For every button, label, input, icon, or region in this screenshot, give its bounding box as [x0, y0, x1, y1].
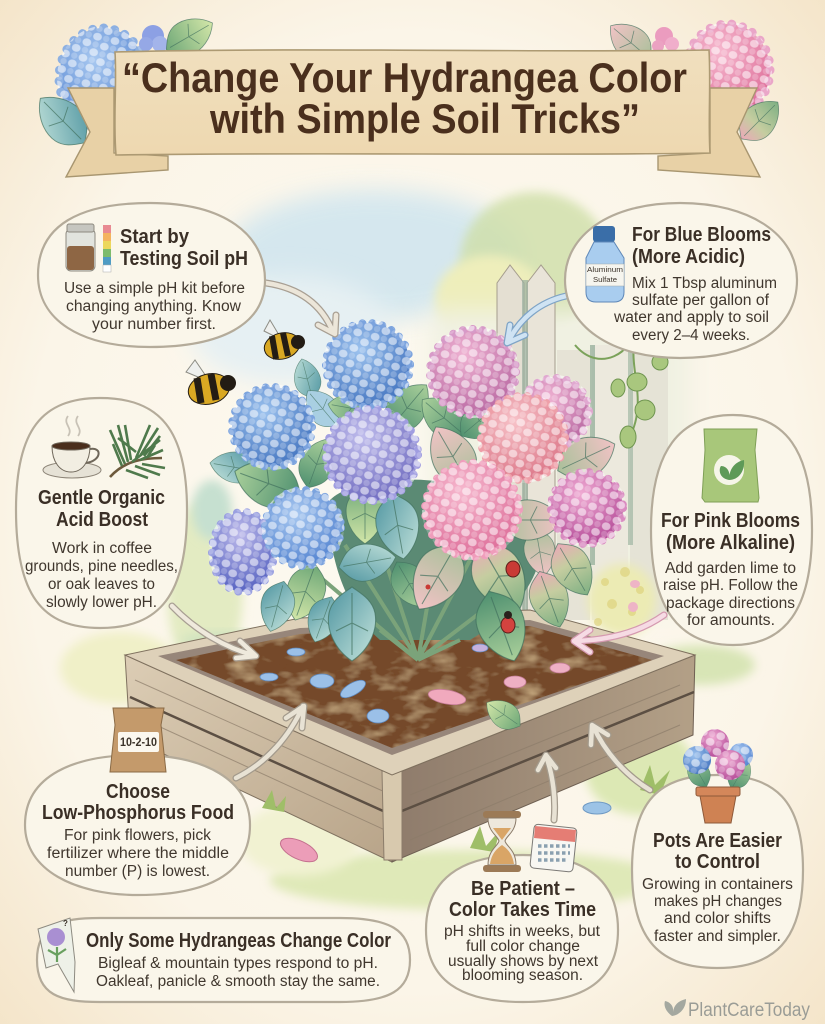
arrows	[172, 283, 664, 820]
text: Color Takes Time	[449, 899, 596, 921]
text: Testing Soil pH	[120, 248, 248, 270]
text	[444, 878, 601, 984]
raised wooden garden bed	[125, 610, 695, 862]
text	[613, 224, 777, 344]
panel: only some hydrangeas change color	[37, 918, 410, 1002]
soil	[176, 626, 652, 748]
text	[661, 510, 800, 629]
pink head top	[427, 326, 519, 418]
text: (More Acidic)	[632, 246, 745, 268]
text: Choose	[106, 781, 170, 803]
text: faster and simpler.	[654, 928, 781, 945]
text: usually shows by next	[448, 953, 599, 970]
text	[64, 226, 248, 333]
text: Work in coffee	[52, 540, 152, 557]
text: full color change	[466, 938, 580, 955]
ladybugs	[426, 561, 520, 633]
text: Only Some Hydrangeas Change Color	[86, 930, 391, 952]
icon: fertilizer bag: 10-2-10	[120, 735, 157, 749]
text	[42, 781, 234, 880]
title text: “Change Your Hydrangea Color	[122, 54, 687, 101]
text	[86, 930, 391, 990]
garden watercolor backdrop	[60, 190, 755, 910]
text: grounds, pine needles,	[25, 558, 178, 575]
text: Low-Phosphorus Food	[42, 802, 234, 824]
text: Be Patient –	[471, 878, 575, 900]
title text	[122, 54, 687, 142]
text: blooming season.	[462, 967, 583, 984]
panel: for blue blooms	[565, 203, 797, 358]
icon: garden lime bag	[702, 429, 759, 502]
panel: choose low-phosphorus food	[25, 708, 250, 895]
text: Mix 1 Tbsp aluminum	[632, 275, 777, 292]
panel: for pink blooms	[651, 415, 812, 645]
yellow bush	[588, 564, 656, 636]
text: makes pH changes	[654, 893, 782, 910]
arrow: gentle acid	[172, 606, 256, 658]
bee lower	[185, 360, 236, 409]
flower: pink hydrangea	[600, 13, 790, 150]
icon: soil jar and test strip	[66, 224, 111, 272]
arrow: phosphorus	[236, 706, 304, 778]
panel: start by testing soil pH	[38, 203, 265, 347]
icon: hourglass	[483, 811, 521, 872]
text: Add garden lime to	[665, 560, 796, 577]
text: raise pH. Follow the	[663, 577, 798, 594]
text: Oakleaf, panicle & smooth stay the same.	[96, 973, 380, 990]
text: number (P) is lowest.	[65, 863, 210, 880]
text: for amounts.	[687, 612, 775, 629]
text: your number first.	[92, 316, 216, 333]
petals on soil	[260, 644, 570, 723]
flower: blue hydrangea	[26, 8, 221, 157]
text	[642, 830, 793, 945]
panel: pots are easier to control	[632, 729, 803, 968]
icon: aluminum sulfate bottle: Aluminum	[587, 265, 623, 274]
banner flowers	[26, 8, 790, 157]
text: and color shifts	[664, 910, 771, 927]
icon: pine sprig	[110, 425, 165, 478]
icon: plant tag	[38, 918, 75, 992]
text: Acid Boost	[56, 509, 148, 531]
leaves	[207, 356, 623, 669]
title text: with Simple Soil Tricks”	[209, 95, 640, 142]
text: Pots Are Easier	[653, 830, 782, 852]
bee upper	[261, 320, 305, 363]
salmon head	[478, 393, 568, 483]
arrow: patience	[538, 755, 556, 820]
icon: coffee cup	[43, 416, 101, 478]
text: Growing in containers	[642, 876, 793, 893]
rose head	[422, 460, 522, 560]
lavender head	[323, 406, 421, 504]
text: or oak leaves to	[48, 576, 155, 593]
icon: plant tag: ?	[63, 919, 68, 928]
text: Use a simple pH kit before	[64, 280, 245, 297]
arrow: start to plant	[266, 283, 336, 334]
stems	[300, 545, 510, 660]
hydrangea plant	[207, 320, 626, 669]
text: (More Alkaline)	[666, 532, 795, 554]
flower heads	[209, 320, 626, 595]
icon: fertilizer bag	[110, 708, 166, 772]
text: pH shifts in weeks, but	[444, 923, 601, 940]
panel: gentle organic acid boost	[16, 398, 187, 628]
icon: potted hydrangea	[681, 729, 757, 823]
text: For pink flowers, pick	[64, 827, 211, 844]
text: For Blue Blooms	[632, 224, 771, 246]
purple head	[209, 509, 277, 595]
panel: be patient	[426, 811, 618, 1002]
text: package directions	[666, 595, 795, 612]
text: Gentle Organic	[38, 487, 165, 509]
logo: PlantCareToday: PlantCareToday	[688, 1000, 810, 1021]
text: to Control	[675, 851, 760, 873]
wooden fence with vine	[497, 265, 668, 636]
grass and fallen petals	[262, 765, 670, 867]
text: changing anything. Know	[66, 298, 242, 315]
text: water and apply to soil	[613, 309, 769, 326]
text: sulfate per gallon of	[632, 292, 770, 309]
arrow: pink blooms	[574, 615, 664, 652]
icon: aluminum sulfate bottle	[586, 226, 624, 302]
blue head top	[323, 320, 413, 410]
text: Start by	[120, 226, 190, 248]
arrow: blue blooms	[507, 296, 566, 343]
text	[25, 487, 178, 611]
text: every 2–4 weeks.	[632, 327, 750, 344]
foliage shadow	[329, 480, 542, 640]
icon: calendar	[530, 824, 577, 872]
title banner	[66, 50, 760, 177]
blue head low	[262, 487, 344, 569]
text: fertilizer where the middle	[47, 845, 229, 862]
pink head right	[518, 375, 592, 449]
text: slowly lower pH.	[46, 594, 157, 611]
text: For Pink Blooms	[661, 510, 800, 532]
blue head left	[229, 384, 315, 470]
icon: aluminum sulfate bottle: Sulfate	[593, 275, 617, 284]
arrow: pots	[591, 725, 650, 790]
text: Bigleaf & mountain types respond to pH.	[98, 955, 378, 972]
magenta head	[548, 469, 626, 547]
